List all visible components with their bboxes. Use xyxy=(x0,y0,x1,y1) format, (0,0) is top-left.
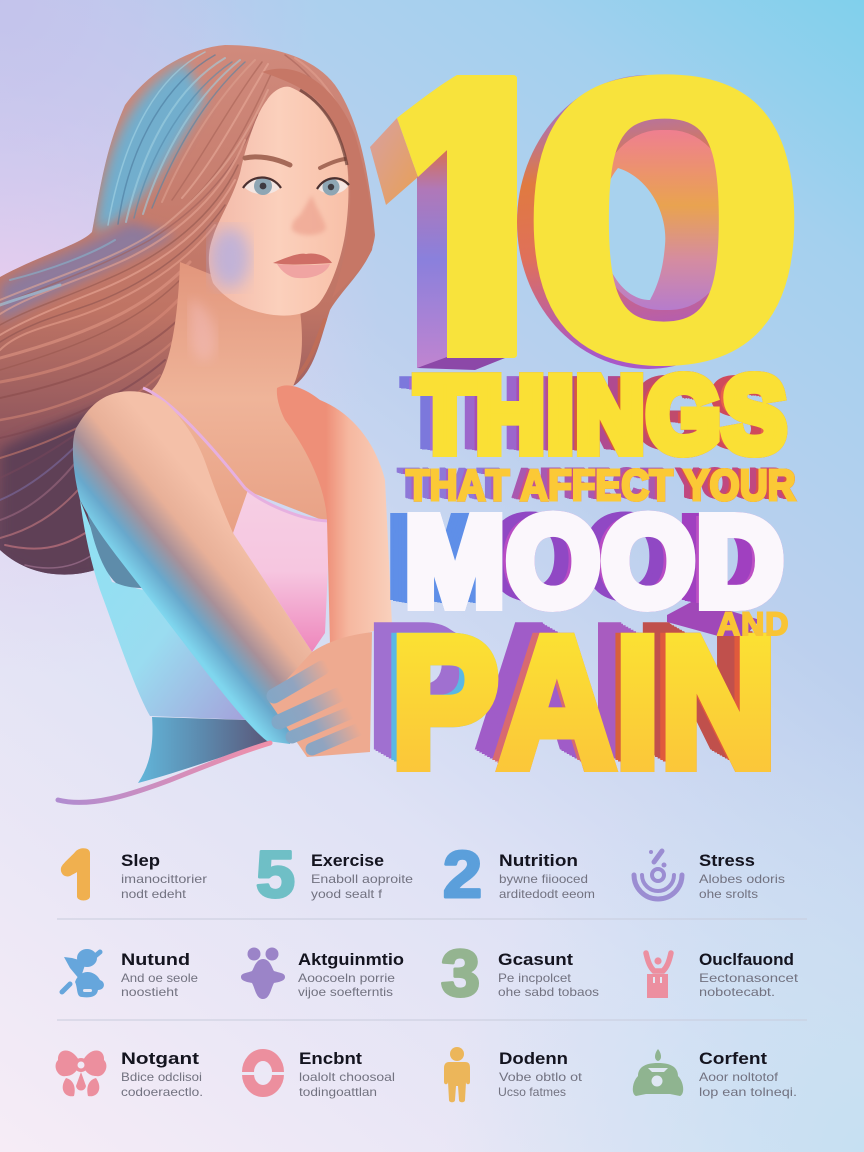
item: Encbnt: Encbnt xyxy=(299,1050,363,1068)
item: Slep: nodt edeht xyxy=(121,887,187,901)
pink tank top xyxy=(233,490,328,652)
item: Stress: Alobes odoris xyxy=(699,872,785,886)
item: Nutrition: bywne fiiooced xyxy=(499,872,588,886)
item: Encbnt xyxy=(240,1050,395,1099)
heading line: THINGS extrusion: THINGS xyxy=(416,356,788,474)
inner wall of the 0 xyxy=(596,130,734,310)
dark armhole xyxy=(86,505,145,588)
item: Dodenn: Dodenn xyxy=(499,1050,568,1068)
item: Nutund: noostieht xyxy=(121,985,179,999)
item: Notgant xyxy=(56,1050,203,1099)
item: Slep: imanocittorier xyxy=(121,872,207,886)
item: Exercise xyxy=(256,837,413,911)
neck highlight xyxy=(190,300,216,361)
heading line: MOOD: MOOD xyxy=(405,491,785,632)
icon: numeral 5: 5 xyxy=(256,837,295,911)
item: Nutrition: arditedodt eeom xyxy=(499,887,595,901)
item: Nutrition xyxy=(443,837,595,911)
hair mass xyxy=(0,45,375,579)
neck and chest xyxy=(150,262,335,535)
item: Stress: ohe srolts xyxy=(699,887,758,901)
item: Exercise: Exercise xyxy=(311,852,384,870)
icon: green seated figure xyxy=(633,1049,683,1096)
face xyxy=(209,87,349,316)
item: Corfent: lop ean tolneqi. xyxy=(699,1085,797,1099)
right forearm and hand on chest xyxy=(277,385,392,645)
heading line: PAIN extrusion: PAIN xyxy=(391,600,776,806)
item: Ouclfauond: Eectonasoncet xyxy=(699,971,799,985)
item: Nutund xyxy=(62,949,198,999)
hairline shading xyxy=(300,90,347,165)
icon: pink flower xyxy=(56,1050,106,1096)
fingers xyxy=(274,668,362,749)
lips xyxy=(273,253,332,278)
item: Gcasunt xyxy=(441,936,599,1010)
item: Aktguinmtio xyxy=(241,948,404,999)
item: Notgant: Bdice odclisoi xyxy=(121,1070,202,1084)
left arm and shoulder xyxy=(73,391,312,744)
factors grid xyxy=(56,848,807,1102)
icon: pink split ring xyxy=(240,1055,286,1091)
big numeral 10 xyxy=(370,74,794,370)
heading line: THINGS: THINGS xyxy=(416,356,788,474)
item: Aktguinmtio: Aktguinmtio xyxy=(298,951,404,969)
item: Aktguinmtio: vijoe soefterntis xyxy=(298,985,393,999)
heading line: MOOD extrusion: MOOD xyxy=(405,491,785,632)
icon: yellow person xyxy=(444,1047,470,1102)
item: Ouclfauond: Ouclfauond xyxy=(699,951,794,969)
blue tank top xyxy=(80,500,250,720)
heading word: AND: AND xyxy=(717,606,789,642)
item: Nutund: And oe seole xyxy=(121,971,198,985)
icon: numeral 3: 3 xyxy=(441,936,480,1010)
numeral 0 face: 0 xyxy=(512,0,817,450)
cheek shadow xyxy=(210,228,250,288)
extrusion of the 0 xyxy=(517,75,779,369)
item: Exercise: yood sealt f xyxy=(311,887,383,901)
tank top neckline xyxy=(143,388,328,521)
icon: lilac star figure xyxy=(241,948,285,999)
item: Exercise: Enaboll aoproite xyxy=(311,872,413,886)
item: Ouclfauond: nobotecabt. xyxy=(699,985,775,999)
item: Corfent xyxy=(633,1049,797,1099)
icon: numeral 2: 2 xyxy=(443,837,482,911)
item: Gcasunt: ohe sabd tobaos xyxy=(498,985,599,999)
item: Dodenn: Vobe obtlo ot xyxy=(499,1070,583,1084)
waist xyxy=(138,717,270,783)
item: Corfent: Corfent xyxy=(699,1050,768,1068)
illustration: woman with long flowing hair xyxy=(0,45,392,805)
front hair strand framing face xyxy=(262,69,373,298)
eyebrows xyxy=(245,157,345,168)
item: Notgant: Notgant xyxy=(121,1050,200,1068)
heading line: PAIN: PAIN xyxy=(391,600,776,806)
icon: pink raised arms figure xyxy=(646,953,671,998)
item: Aktguinmtio: Aoocoeln porrie xyxy=(298,971,395,985)
item: Encbnt: todingoattlan xyxy=(299,1085,377,1099)
icon: stress ripples xyxy=(634,850,682,899)
heading line: THAT AFFECT YOUR: THAT AFFECT YOUR xyxy=(406,462,795,510)
lower hand xyxy=(268,632,372,757)
item: Slep xyxy=(60,848,207,900)
item: Stress xyxy=(634,850,785,901)
item: Dodenn: Ucso fatmes xyxy=(498,1085,566,1099)
item: Ouclfauond xyxy=(646,951,799,999)
item: Stress: Stress xyxy=(699,852,755,870)
item: Encbnt: loalolt choosoal xyxy=(299,1070,395,1084)
item: Gcasunt: Pe incpolcet xyxy=(498,971,572,985)
item: Nutund: Nutund xyxy=(121,951,190,969)
item: Notgant: codoeraectlo. xyxy=(121,1085,203,1099)
item: Gcasunt: Gcasunt xyxy=(498,951,574,969)
icon: numeral 1: 1 xyxy=(58,839,95,913)
nose xyxy=(292,195,326,235)
see-through part of the hole xyxy=(600,168,665,300)
heading line: THAT AFFECT YOUR extrusion: THAT AFFECT YOUR xyxy=(406,462,795,510)
item: Dodenn xyxy=(444,1047,583,1102)
eyes xyxy=(243,177,349,196)
numeral 1 face: 1 xyxy=(375,0,661,447)
extrusion of the 1 xyxy=(370,118,505,370)
item: Nutrition: Nutrition xyxy=(499,852,578,870)
icon: blue creature xyxy=(62,949,104,997)
item: Slep: Slep xyxy=(121,852,160,870)
item: Corfent: Aoor noltotof xyxy=(699,1070,779,1084)
swoosh line xyxy=(58,743,270,802)
